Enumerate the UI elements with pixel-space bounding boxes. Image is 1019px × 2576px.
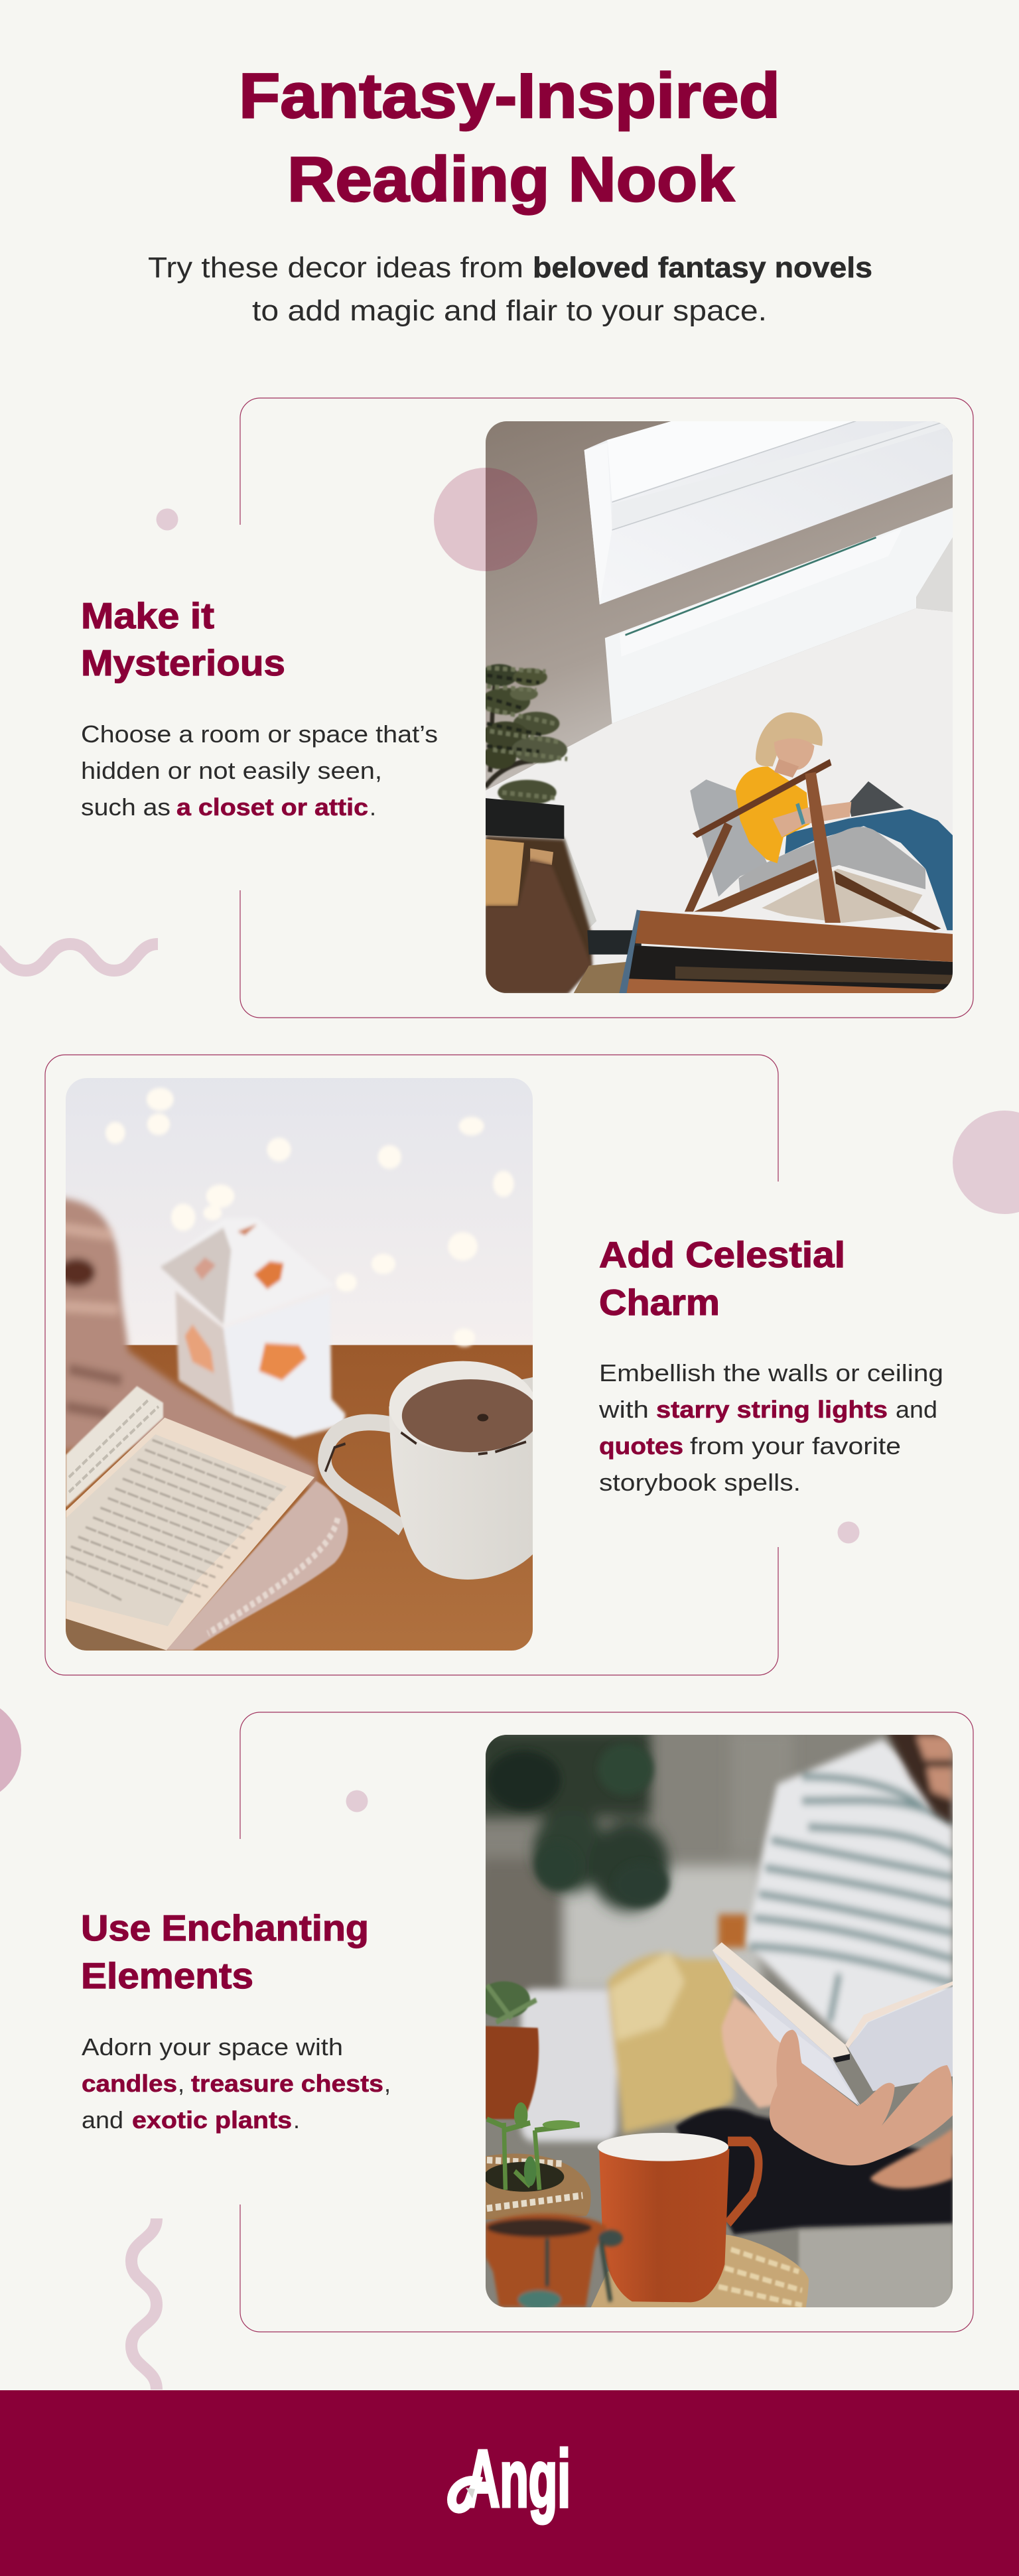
body text: from your favorite [690,1432,901,1459]
stair box [561,835,596,930]
subtitle [148,251,872,327]
knitted coaster [165,1481,348,1651]
book [66,1386,163,1507]
body text: , [178,2070,184,2097]
heading: Add Celestial [599,1234,845,1275]
panel outline [240,1712,973,2332]
body text: exotic plants [132,2106,292,2134]
body text: quotes [599,1432,683,1459]
decorative wave [0,944,158,971]
body text: candles [82,2070,177,2097]
subtitle: beloved fantasy novels [533,251,872,284]
body text: with [598,1396,649,1423]
body text: such as [81,793,170,821]
dark trousers [675,2108,953,2234]
sweater [736,766,809,863]
body text: , [384,2070,391,2097]
body text: and [82,2106,123,2134]
decorative dot [837,1522,860,1543]
body text [81,720,438,821]
left pot [478,1982,539,2119]
basket and plant [486,2153,591,2220]
panel outline [45,1055,778,1675]
decorative circle over photo [434,468,537,571]
bokeh lights [105,1088,514,1347]
panel: make it mysterious [81,398,973,1018]
panel: use enchanting elements [81,1712,973,2332]
arm [722,1996,789,2108]
hands [770,2030,953,2165]
subtitle: to add magic and flair to your space. [252,295,767,327]
body text: Choose a room or space that’s [81,720,438,748]
subtitle: Try these decor ideas from [148,251,523,284]
heading [599,1234,845,1323]
photo: lantern, book and cocoa [58,1071,544,1654]
decorative vertical wave [131,2218,157,2390]
heading: Use Enchanting [81,1907,369,1948]
heading: Elements [81,1955,253,1996]
lantern [160,1219,346,1438]
book [713,1942,850,2059]
body text: Adorn your space with [82,2033,343,2061]
heading: Make it [81,595,214,636]
body text: . [370,793,376,821]
photo: man reading with mug and plants [478,1728,962,2312]
footer band [0,2390,1019,2576]
mug [728,2141,759,2223]
mug [324,1422,403,1528]
heading [81,1907,369,1996]
title: Fantasy-Inspired [239,60,780,131]
body text [82,2033,391,2134]
title: Reading Nook [287,144,735,215]
heading [81,595,285,683]
decorative dot [346,1790,368,1812]
chair frame [693,759,832,838]
decorative dot [157,508,178,531]
body text: starry string lights [656,1396,888,1423]
head and hair [756,712,823,766]
jeans [785,809,953,930]
title [239,60,780,215]
body text: a closet or attic [176,793,368,821]
panel: add celestial charm [45,1055,943,1675]
front pot [486,2214,623,2309]
body text: storybook spells. [599,1469,801,1496]
photo: woman reading under skylights [478,415,962,998]
sofa and cushion [521,1915,746,2141]
face and beard [886,1728,953,1825]
logo: Angi: Angi [466,2433,571,2524]
body text: Embellish the walls or ceiling [599,1359,943,1387]
heading: Mysterious [81,642,285,683]
body text [598,1359,943,1496]
body text: treasure chests [191,2070,383,2097]
logo: Angi [452,2433,571,2524]
chair back [690,780,768,897]
heading: Charm [599,1282,720,1323]
decorative circle right [953,1111,1019,1214]
decorative circle left [0,1698,21,1802]
scarf [58,1198,316,1489]
panel outline [240,398,973,1018]
light sofa front [799,2225,953,2312]
body text: hidden or not easily seen, [81,757,382,784]
body text: . [293,2106,300,2134]
body text: and [896,1396,937,1423]
shirt [746,1739,953,2045]
forearm and tablet [849,781,904,817]
cushion [738,827,925,895]
blurred leaves [478,1728,669,1911]
coaster [589,2234,809,2312]
tree [481,664,567,805]
